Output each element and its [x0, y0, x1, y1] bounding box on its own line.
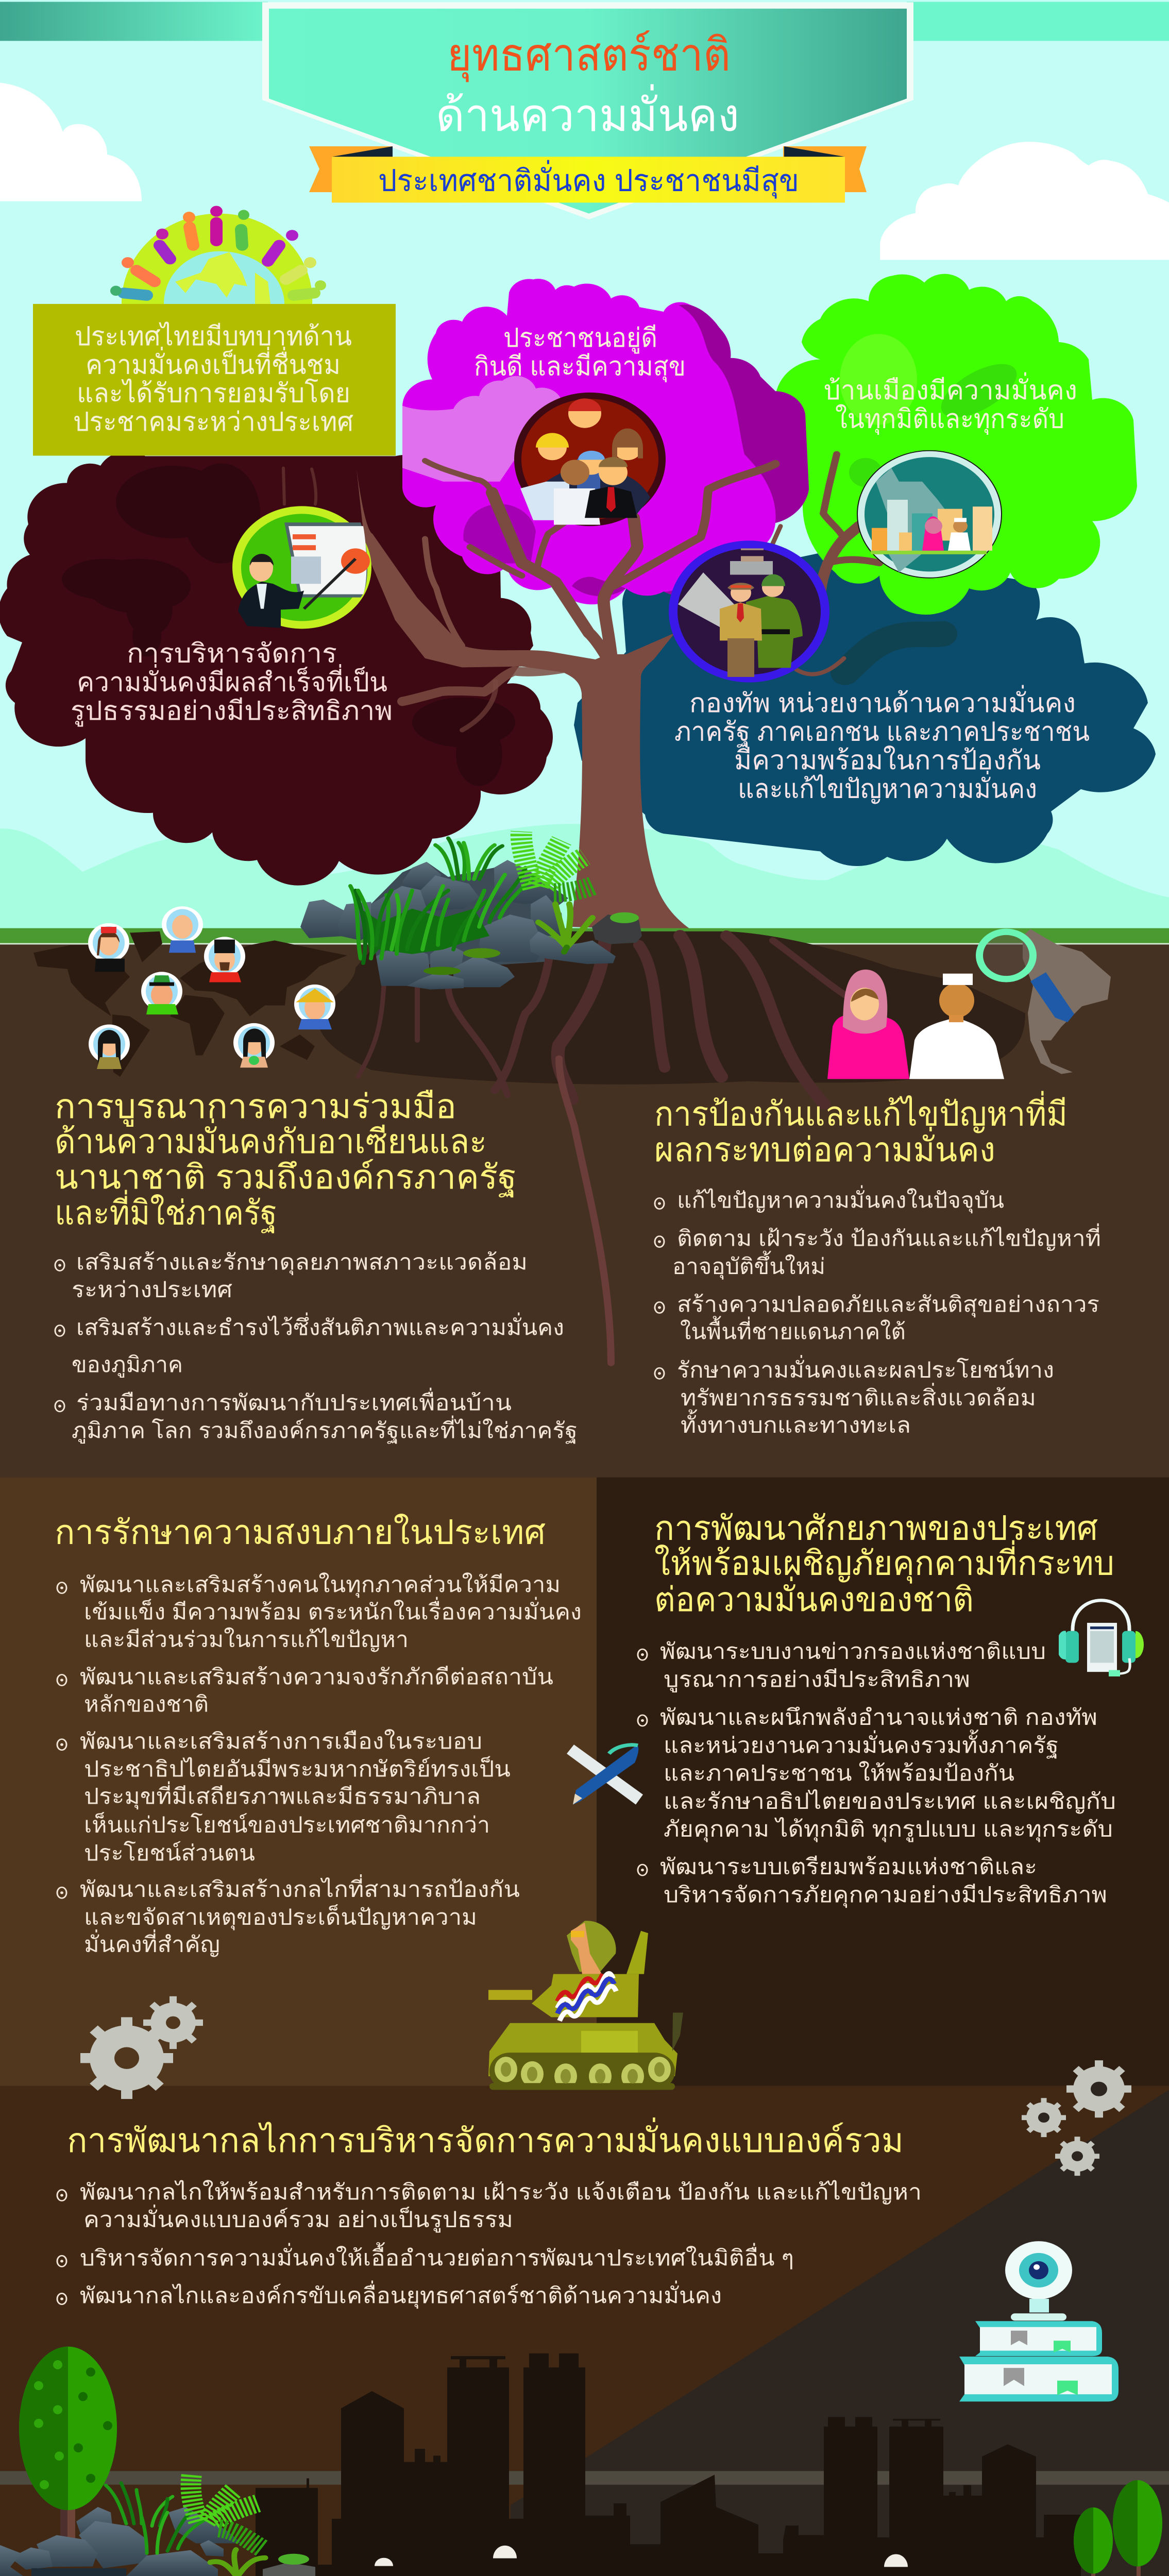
- list: cooperation: ของภูมิภาค: [72, 1352, 183, 1378]
- icon: Thailand map and magnifier: [979, 929, 1111, 1074]
- icon: tank with soldier: [488, 1921, 683, 2090]
- heading: cooperation: นานาชาติ รวมถึงองค์กรภาครัฐ: [55, 1158, 517, 1197]
- icon: pencil and ruler: [567, 1744, 643, 1805]
- icon: globe with people: [110, 206, 326, 304]
- list: internal security: ประชาธิปไตยอันมีพระมหากษัตริย์ทรงเป็น: [84, 1756, 511, 1781]
- icon: headset with document: [1059, 1600, 1144, 1676]
- heading: cooperation: [55, 1088, 517, 1233]
- text: blue crown: กองทัพ หน่วยงานด้านความมั่นคง: [689, 685, 1076, 718]
- icon: people circle: [514, 393, 666, 526]
- heading: prevention: [654, 1091, 1068, 1168]
- text: blue crown: และแก้ไขปัญหาความมั่นคง: [738, 771, 1037, 804]
- list: integrated mechanisms: พัฒนากลไกให้พร้อมสำหรับการติดตาม เฝ้าระวัง แจ้งเตือน ป้องกัน และแก้ไขปัญหา: [80, 2180, 922, 2204]
- text: green crown: ในทุกมิติและทุกระดับ: [835, 404, 1064, 435]
- title: ยุทธศาสตร์ชาติ: [447, 29, 731, 82]
- panel: yellow goal box: ประชาคมระหว่างประเทศ: [73, 406, 353, 436]
- foliage: green crown: [775, 274, 1137, 615]
- domes: [375, 2546, 908, 2567]
- list: cooperation: ระหว่างประเทศ: [72, 1277, 232, 1302]
- section background: integrated mechanisms: [0, 2086, 1169, 2576]
- list: internal security: และมีส่วนร่วมในการแก้ไขปัญหา: [84, 1627, 409, 1652]
- list: capability: และภาคประชาชน ให้พร้อมป้องกัน: [664, 1761, 1014, 1785]
- list: internal security: พัฒนาและเสริมสร้างความจงรักภักดีต่อสถาบัน: [80, 1665, 553, 1689]
- icon: gears left: [80, 1996, 203, 2099]
- panel: yellow goal box: [33, 304, 396, 455]
- text: maroon crown: การบริหารจัดการ: [127, 638, 337, 668]
- text: magenta crown: [474, 323, 686, 382]
- list: integrated mechanisms: พัฒนากลไกและองค์กรขับเคลื่อนยุทธศาสตร์ชาติด้านความมั่นคง: [80, 2280, 722, 2309]
- heading: integrated mechanisms: การพัฒนากลไกการบริหารจัดการความมั่นคงแบบองค์รวม: [67, 2117, 904, 2159]
- cloud left: [0, 82, 142, 201]
- portrait 5: [294, 985, 335, 1029]
- list: prevention: สร้างความปลอดภัยและสันติสุขอย่างถาวร: [677, 1292, 1099, 1317]
- portrait 4: [141, 972, 182, 1014]
- list: prevention: ในพื้นที่ชายแดนภาคใต้: [680, 1316, 906, 1344]
- ground band: [0, 928, 1169, 943]
- top band: [0, 2, 1169, 41]
- foliage: magenta crown: [402, 279, 809, 604]
- text: maroon crown: [71, 638, 393, 726]
- list: cooperation: ร่วมมือทางการพัฒนากับประเทศเพื่อนบ้าน: [76, 1387, 512, 1415]
- ribbon: [309, 146, 867, 202]
- portrait 1: [88, 923, 129, 972]
- icon: couple: [827, 970, 1004, 1079]
- list: integrated mechanisms: ความมั่นคงแบบองค์รวม อย่างเป็นรูปธรรม: [83, 2205, 513, 2233]
- list: capability: พัฒนาระบบงานข่าวกรองแห่งชาติแบบ: [660, 1639, 1046, 1664]
- heading: capability: ต่อความมั่นคงของชาติ: [654, 1577, 974, 1618]
- text: blue crown: [674, 685, 1090, 804]
- list: internal security: ประโยชน์ส่วนตน: [84, 1841, 255, 1865]
- heading: prevention: ผลกระทบต่อความมั่นคง: [654, 1127, 995, 1168]
- text: maroon crown: รูปธรรมอย่างมีประสิทธิภาพ: [71, 696, 393, 726]
- list: prevention: รักษาความมั่นคงและผลประโยชน์ทาง: [677, 1355, 1054, 1382]
- heading: capability: [654, 1510, 1114, 1618]
- list: cooperation: ภูมิภาค โลก รวมถึงองค์กรภาครัฐและที่ไม่ใช่ภาครัฐ: [72, 1415, 578, 1444]
- portrait 7: [233, 1023, 275, 1067]
- text: magenta crown: กินดี และมีความสุข: [474, 351, 686, 382]
- panel: yellow goal box: ความมั่นคงเป็นที่ชื่นชม: [86, 347, 341, 380]
- banner: [262, 2, 913, 219]
- list: cooperation: เสริมสร้างและรักษาดุลยภาพสภาวะแวดล้อม: [76, 1249, 528, 1275]
- icon: soldiers circle: [669, 540, 829, 683]
- list: capability: พัฒนาระบบเตรียมพร้อมแห่งชาติและ: [660, 1854, 1037, 1879]
- text: blue crown: มีความพร้อมในการป้องกัน: [734, 745, 1041, 775]
- tree left: [19, 2347, 117, 2544]
- heading: capability: การพัฒนาศักยภาพของประเทศ: [654, 1510, 1098, 1547]
- portrait 6: [89, 1025, 130, 1069]
- text: green crown: [824, 372, 1077, 435]
- trees right: [1074, 2480, 1162, 2576]
- panel: capability background: [597, 1478, 1169, 2086]
- heading: prevention: การป้องกันและแก้ไขปัญหาที่มี: [654, 1091, 1068, 1133]
- text: green crown: บ้านเมืองมีความมั่นคง: [824, 372, 1077, 405]
- text: maroon crown: ความมั่นคงมีผลสำเร็จที่เป็น: [77, 664, 387, 697]
- text: blue crown: ภาครัฐ ภาคเอกชน และภาคประชาชน: [674, 717, 1090, 747]
- icon: presenter circle: [232, 506, 371, 629]
- list: cooperation: [55, 1249, 578, 1444]
- foliage: maroon crown: [0, 451, 553, 886]
- panel: yellow goal box: และได้รับการยอมรับโดย: [77, 378, 350, 408]
- illustration: rocks and grass bottom: [0, 2474, 315, 2576]
- heading: internal security: การรักษาความสงบภายในประเทศ: [55, 1514, 546, 1551]
- list: capability: [638, 1639, 1116, 1908]
- list: prevention: ทรัพยากรธรรมชาติและสิ่งแวดล้อม: [681, 1383, 1036, 1410]
- list: capability: พัฒนาและผนึกพลังอำนาจแห่งชาติ กองทัพ: [660, 1705, 1097, 1730]
- list: cooperation: เสริมสร้างและธำรงไว้ซึ่งสันติภาพและความมั่นคง: [76, 1312, 564, 1340]
- soil shadow and roots: [317, 931, 1025, 1363]
- list: internal security: มั่นคงที่สำคัญ: [84, 1929, 220, 1957]
- list: capability: บริหารจัดการภัยคุกคามอย่างมีประสิทธิภาพ: [664, 1883, 1107, 1908]
- skyline: [256, 2353, 1081, 2576]
- text: magenta crown: ประชาชนอยู่ดี: [503, 323, 657, 353]
- list: internal security: เข้มแข็ง มีความพร้อม ตระหนักในเรื่องความมั่นคง: [84, 1597, 582, 1624]
- list: internal security: [57, 1572, 582, 1957]
- list: capability: ภัยคุกคาม ได้ทุกมิติ ทุกรูปแบบ และทุกระดับ: [664, 1817, 1113, 1842]
- foliage: blue crown: [574, 550, 1156, 866]
- list: integrated mechanisms: [57, 2180, 922, 2309]
- list: capability: บูรณาการอย่างมีประสิทธิภาพ: [664, 1667, 970, 1692]
- list: prevention: ทั้งทางบกและทางทะเล: [681, 1410, 911, 1437]
- list: internal security: หลักของชาติ: [84, 1692, 209, 1716]
- list: internal security: พัฒนาและเสริมสร้างการเมืองในระบอบ: [80, 1729, 482, 1754]
- list: prevention: [655, 1185, 1101, 1437]
- portrait 3: [204, 937, 245, 982]
- illustration: rocks and grass: [300, 832, 642, 990]
- ribbon text: ประเทศชาติมั่นคง ประชาชนมีสุข: [378, 160, 799, 198]
- sky background: [0, 0, 1169, 945]
- section background: soil: [0, 943, 1169, 1478]
- list: capability: และหน่วยงานความมั่นคงรวมทั้งภาครัฐ: [664, 1730, 1059, 1758]
- list: capability: และรักษาอธิปไตยของประเทศ และเผชิญกับ: [664, 1789, 1116, 1814]
- heading: cooperation: การบูรณาการความร่วมมือ: [55, 1088, 456, 1127]
- heading: cooperation: ด้านความมั่นคงกับอาเซียนและ: [55, 1118, 487, 1160]
- list: internal security: เห็นแก่ประโยชน์ของประเทศชาติมากกว่า: [84, 1812, 490, 1837]
- horizon strip: [0, 2471, 1169, 2485]
- list: prevention: ติดตาม เฝ้าระวัง ป้องกันและแก้ไขปัญหาที่: [677, 1223, 1101, 1250]
- title: ด้านความมั่นคง: [436, 84, 739, 141]
- portrait 2: [162, 906, 203, 953]
- list: internal security: พัฒนาและเสริมสร้างคนในทุกภาคส่วนให้มีความ: [80, 1572, 561, 1598]
- list: internal security: ประมุขที่มีเสถียรภาพและมีธรรมาภิบาล: [84, 1781, 481, 1809]
- list: internal security: พัฒนาและเสริมสร้างกลไกที่สามารถป้องกัน: [80, 1874, 520, 1902]
- icon: world map with portraits: [33, 906, 347, 1077]
- tree trunk and branches: [283, 454, 879, 931]
- title: [436, 29, 739, 141]
- list: integrated mechanisms: บริหารจัดการความมั่นคงให้เอื้ออำนวยต่อการพัฒนาประเทศในมิติอื่น ๆ: [80, 2242, 794, 2270]
- list: internal security: และขจัดสาเหตุของประเด็นปัญหาความ: [84, 1904, 477, 1930]
- icon: gears right: [1022, 2060, 1131, 2176]
- icon: city circle: [857, 451, 1002, 578]
- heading: cooperation: และที่มิใช่ภาครัฐ: [55, 1190, 277, 1233]
- cloud right: [880, 142, 1169, 260]
- list: prevention: แก้ไขปัญหาความมั่นคงในปัจจุบัน: [677, 1185, 1004, 1213]
- list: prevention: อาจอุบัติขึ้นใหม่: [672, 1251, 825, 1280]
- icon: camera on books: [959, 2241, 1119, 2401]
- panel: yellow goal box: ประเทศไทยมีบทบาทด้าน: [75, 321, 352, 351]
- panel: internal security background: [0, 1478, 597, 2086]
- mountains: [0, 824, 1169, 928]
